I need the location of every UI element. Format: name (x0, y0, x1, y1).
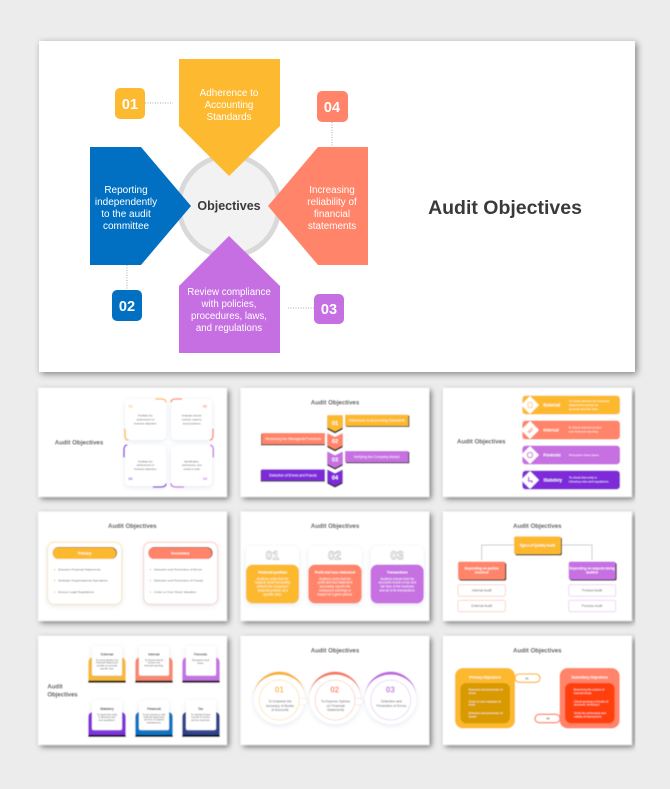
box Depending on parties involved: Depending on parties (465, 567, 499, 571)
circle 03: Detection and (381, 700, 402, 704)
card Profit and loss statement: losses for a given period. (317, 593, 353, 597)
arrow: Increasing reliability: Increasing (309, 185, 355, 196)
heading: Audit Objectives (55, 440, 104, 447)
panel Primary Objectives: Under or over valuation of (469, 699, 501, 703)
card Transactions (371, 546, 424, 603)
step 03: Verifying the Company Assets (354, 455, 400, 459)
row External: To check whether the Financial (569, 399, 609, 403)
arrow: Increasing reliability: reliability of (307, 197, 357, 208)
arrow: Review compliance: and regulations (196, 323, 262, 334)
card 02: 02 (203, 405, 207, 409)
row Internal: To Check Internal Control (568, 426, 602, 430)
panel Subsidiary Objectives: accounts, verifying it. (574, 703, 600, 707)
circle 01 (254, 672, 305, 724)
arrow: Review compliance: Review compliance (187, 287, 271, 298)
card Profit and loss statement: Auditors verify that the (319, 577, 351, 581)
box Depending on aspects being audited: audited (586, 571, 598, 575)
card 02 (171, 399, 213, 440)
heading: Audit Objectives (311, 523, 360, 530)
card 01: achievement of (137, 417, 154, 421)
box Process Audit (569, 600, 616, 612)
step 04: Detection of Errors and Frauds (269, 473, 317, 477)
card Transactions: accounts reveal a true and (379, 581, 416, 585)
card Financial position: balance sheet accurately (255, 581, 291, 585)
card 03: Facilitate the (138, 459, 153, 463)
panel: slide 2 chevron steps (241, 388, 429, 497)
card Primary: Ensure Legal Regulations (58, 590, 95, 594)
box Types of Quality Audit: Types of Quality Audit (520, 543, 556, 547)
panel: slide 9 primary and subsidiary objectives (443, 636, 632, 745)
arrow: Reporting independently: independently (95, 197, 157, 208)
card 01 (125, 399, 166, 440)
box Types of Quality Audit (514, 536, 562, 555)
panel: slide 6 types of quality audit (443, 512, 632, 621)
step 02 (261, 433, 343, 451)
card Financial position: reflects the company's (257, 585, 289, 589)
card Internal (135, 646, 173, 683)
card Statutory: Statutory (100, 707, 114, 711)
box Product Audit: Product Audit (582, 589, 602, 593)
connectors (482, 545, 592, 560)
panel Subsidiary Objectives: internal check. (574, 691, 592, 695)
card Financial position: 01 (266, 549, 279, 563)
card External: External (101, 653, 113, 657)
card Secondary: Under or Over Stock Valuation (154, 590, 196, 594)
box External Audit (458, 600, 505, 612)
card External (88, 646, 126, 683)
panel Subsidiary Objectives: Verify the authenticity and (574, 711, 606, 715)
card External: provide an accurate (97, 664, 118, 667)
arrow: Adherence to Accounting Standards: Standards (206, 112, 252, 123)
step 04 (261, 469, 343, 488)
box Depending on parties involved: involved (475, 571, 488, 575)
panel Primary Objectives: stock (469, 703, 476, 707)
badge 02: 02 (119, 299, 135, 315)
circle 02: on Financial (327, 704, 345, 708)
arrow: Review compliance (179, 236, 280, 353)
panel Primary Objectives: frauds (469, 714, 477, 718)
card External: Financial Statements (96, 662, 119, 665)
row External (521, 396, 620, 414)
arrow: Adherence to Accounting Standards (179, 59, 280, 176)
card 02: and procedures (183, 421, 201, 425)
step 01: Adherence to Accounting Standards (349, 419, 405, 423)
step 03 (327, 451, 409, 470)
row Statutory: Statutory (543, 478, 563, 483)
row Forensic: Recognize fraud cases. (569, 453, 600, 457)
card Secondary (144, 542, 218, 604)
arrow 02 to 03 (355, 698, 365, 705)
panel Subsidiary Objectives: Check accuracy of books of (574, 699, 608, 703)
card Tax: Tax (198, 707, 204, 711)
card Tax: and tax expenses. (191, 719, 211, 722)
card Financial: Financial (147, 707, 161, 711)
panel Subsidiary Objectives: Subsidiary Objectives (571, 675, 608, 679)
heading: Audit Objectives (457, 438, 506, 445)
panel: slide 8 three circles (241, 636, 429, 745)
card Tax (182, 700, 220, 737)
center circle: Objectives: Objectives (197, 199, 261, 213)
box Product Audit (569, 585, 616, 596)
heading: Audit Objectives (513, 523, 562, 530)
card Profit and loss statement: accurately reports the (320, 585, 351, 589)
row External: accurate and fair view. (569, 407, 598, 411)
card 04: assessment, and (182, 463, 202, 467)
row Internal: over financial reporting. (568, 430, 599, 434)
panel Primary Objectives: Primary Objectives (469, 675, 501, 679)
panel Subsidiary Objectives: validity of transactions. (574, 714, 602, 718)
card Primary: Evaluate Organizational Operations (58, 579, 108, 583)
circle 03: Prevention of Errors (376, 704, 407, 708)
arrow: Adherence to Accounting Standards: Accounting (205, 100, 253, 111)
box Depending on aspects being audited: Depending on aspects being (569, 567, 615, 571)
card Secondary: Detection and Prevention of Frauds (154, 579, 204, 583)
card Transactions: Auditors ensure that the (380, 577, 414, 581)
circle 02: Statements (327, 708, 345, 712)
card Financial position: Financial position (258, 571, 287, 575)
card External: and fair view. (100, 667, 114, 670)
badge 04: 04 (324, 100, 340, 116)
badge 01 (115, 88, 173, 119)
row Statutory: To check that entity is (569, 476, 597, 480)
arrow: Increasing reliability: financial (314, 209, 350, 220)
arrow 01 to 02 (300, 698, 309, 705)
card Forensic (182, 646, 220, 683)
card Forensic: cases. (197, 662, 204, 665)
arrow: Increasing reliability (268, 147, 368, 265)
pill 02: 02 (546, 717, 550, 721)
card 03: business objectives (134, 467, 157, 471)
card Transactions: 03 (390, 549, 404, 563)
panel: slide 3 audit types (443, 388, 632, 497)
arrow: Reporting independently: to the audit (101, 209, 151, 220)
card 01: 01 (129, 405, 133, 409)
heading: Audit Objectives (311, 399, 360, 406)
card 01: business objectives (134, 421, 157, 425)
card Financial position (246, 546, 299, 603)
card Profit and loss statement: profit and loss statement (318, 581, 352, 585)
pill 01: 01 (525, 676, 529, 680)
card Financial: financial statements (144, 716, 165, 719)
card Transactions: Transactions (387, 571, 408, 575)
circle 01: 01 (275, 685, 284, 694)
box Process Audit: Process Audit (582, 604, 602, 608)
circle 02: To Express Opinion (321, 700, 350, 704)
badge 04 (317, 91, 348, 147)
card Primary (48, 542, 122, 604)
card Financial: misstatement. (147, 722, 162, 725)
circle 01: Accuracy of Books (266, 704, 294, 708)
step 04: 04 (332, 475, 339, 481)
circle 01: To Examine the (268, 700, 292, 704)
card Financial: To get assurance that (143, 713, 166, 716)
card External: To check whether the (96, 659, 119, 662)
box Internal Audit: Internal Audit (472, 589, 492, 593)
row Statutory (521, 471, 620, 489)
card Financial (135, 700, 173, 737)
card Internal: To Check Internal (145, 659, 164, 662)
card 03: 03 (128, 477, 132, 481)
card 02: controls, systems (182, 417, 202, 421)
card Financial position: financial position at a (258, 589, 288, 593)
card Profit and loss statement: 02 (328, 549, 342, 563)
panel Subsidiary Objectives (560, 668, 620, 728)
card Profit and loss statement (308, 546, 362, 603)
panel Primary Objectives: Detection and prevention of (469, 688, 503, 692)
card 03: achievement of (137, 463, 154, 467)
row Statutory: following rules and regulations. (569, 480, 609, 484)
card 04: 04 (203, 477, 208, 481)
card Financial position: specific date. (263, 593, 282, 597)
panel Primary Objectives: errors (469, 691, 477, 695)
panel Primary Objectives: Detection and prevention of (469, 711, 503, 715)
card Transactions: fair face of the business (380, 585, 415, 589)
step 02: Reviewing the Managerial Functions (265, 437, 321, 441)
arrow: Reporting independently (90, 147, 191, 265)
row External: External (543, 403, 560, 408)
card 04: control of risks (183, 467, 201, 471)
pill 01 (515, 674, 540, 682)
card Internal: Control over (148, 662, 161, 665)
row Internal: Internal (543, 428, 559, 433)
circle 01: of Accounts (271, 708, 289, 712)
card 02: Evaluate internal (182, 414, 202, 418)
circle 02 (309, 672, 361, 724)
card Primary: Examine Financial Statements (58, 568, 101, 572)
center circle: Objectives (179, 156, 279, 256)
arrow: Review compliance: with policies, (201, 299, 256, 310)
heading: Audit Objectives (108, 523, 157, 530)
card Statutory: is following rules (98, 716, 116, 719)
row External: Statements provide an (569, 403, 599, 407)
card Tax: records of income (191, 716, 211, 719)
card Statutory: To check that entity (97, 713, 118, 716)
row Internal (521, 421, 620, 439)
title: Audit Objectives (428, 197, 582, 219)
heading: Objectives (47, 693, 78, 699)
box External Audit: External Audit (471, 604, 492, 608)
card Internal: financial reporting. (144, 665, 164, 668)
card Statutory: and regulations. (99, 719, 116, 722)
badge 01: 01 (122, 97, 138, 113)
box Depending on parties involved (458, 562, 506, 581)
card Financial position: Auditors verify that the (257, 577, 289, 581)
card Financial: are free of material (144, 719, 164, 722)
arrow: Increasing reliability: statements (308, 221, 356, 232)
card 01: Facilitate the (138, 414, 153, 418)
card Profit and loss statement: Profit and loss statement (315, 571, 356, 575)
heading: Audit (47, 685, 63, 691)
badge 02 (112, 265, 142, 321)
panel: slide 4 primary and secondary (38, 512, 227, 621)
panel: slide 1 four cards (38, 388, 227, 497)
panel: slide 5 three statements (241, 512, 429, 621)
circle 03 (365, 672, 416, 724)
panel: main slide (39, 41, 635, 372)
card Tax: To maintain Proper (191, 713, 211, 716)
panel: slide 7 six audit cards (38, 636, 227, 745)
card Transactions: and all of its transactions. (379, 589, 415, 593)
badge 03 (288, 294, 344, 324)
arrow: Reporting independently: committee (103, 221, 149, 232)
panel Subsidiary Objectives: Examining the system of (574, 688, 605, 692)
step 01: 01 (332, 421, 338, 427)
card 03 (124, 445, 166, 487)
badge 03: 03 (321, 302, 337, 318)
card Internal: Internal (148, 653, 160, 657)
circle 03: 03 (386, 685, 395, 694)
card Primary: Primary (78, 551, 91, 555)
row Forensic: Forensic (543, 453, 562, 458)
card 04 (171, 445, 213, 487)
step 03: 03 (332, 457, 338, 463)
card 04: Identification, (184, 459, 200, 463)
card Profit and loss statement: company's earnings or (319, 589, 352, 593)
panel Primary Objectives (455, 668, 515, 728)
pill 02 (535, 714, 560, 723)
step 02: 02 (332, 439, 338, 445)
heading: Audit Objectives (513, 647, 562, 654)
circle 02: 02 (330, 685, 340, 694)
arrow: Review compliance: procedures, laws, (191, 311, 267, 322)
row Forensic (521, 446, 620, 464)
heading: Audit Objectives (311, 647, 360, 654)
card Forensic: Recognize fraud (192, 659, 210, 662)
card Forensic: Forensic (194, 653, 207, 657)
arrow: Reporting independently: Reporting (104, 185, 148, 196)
step 01 (327, 415, 409, 433)
card Secondary: Detection and Prevention of Errors (154, 568, 202, 572)
card Secondary: Secondary (171, 551, 189, 555)
box Depending on aspects being audited (569, 562, 617, 581)
box Internal Audit (458, 585, 505, 596)
arrow: Adherence to Accounting Standards: Adherence to (200, 88, 259, 99)
card Statutory (88, 700, 126, 737)
